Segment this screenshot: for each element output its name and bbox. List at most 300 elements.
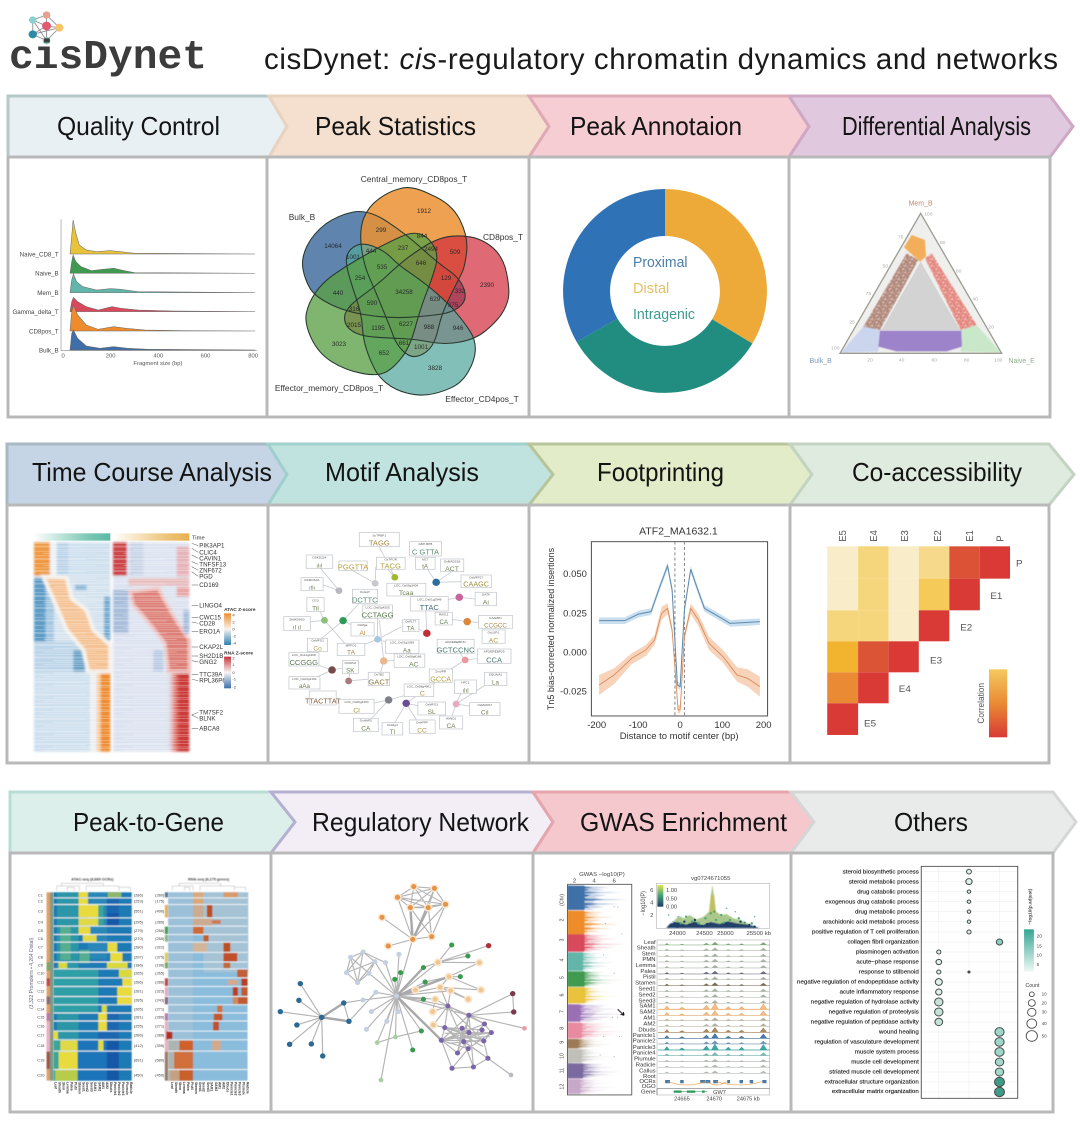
- heatmap labels: E3: [900, 530, 911, 542]
- box: [529, 157, 789, 417]
- venn counts: 6227: [399, 321, 413, 328]
- donut chart: [563, 189, 767, 393]
- box: [8, 157, 267, 417]
- cluster labels and counts: C11: [37, 979, 44, 984]
- genome tracks: Radicle: [636, 1062, 656, 1068]
- cluster labels and counts: C10: [37, 971, 44, 976]
- row side bars: [47, 892, 168, 1081]
- genome tracks: AM2: [643, 1021, 656, 1027]
- cluster labels and counts: (256): [155, 928, 165, 933]
- motif logo boxes: Tl: [390, 729, 395, 736]
- genome tracks: Lemma: [636, 963, 656, 969]
- nodes: purple cluster: [441, 1006, 491, 1068]
- sample labels: Lemma: [182, 1082, 186, 1094]
- sample labels: Panicle2: [233, 1082, 238, 1096]
- heatmap labels: E1: [965, 530, 976, 542]
- header: Regulatory Network: [271, 792, 553, 853]
- genome tracks: Pistil: [643, 975, 656, 981]
- blue series with ribbon: [599, 563, 760, 690]
- header: Others: [791, 792, 1076, 853]
- cluster labels and counts: (255): [134, 1023, 144, 1028]
- genome tracks: Leaf: [644, 940, 656, 946]
- sample labels: SAM2: [214, 1082, 218, 1091]
- genome tracks: Stamen: [635, 981, 656, 987]
- correlation triangle heatmap: [827, 530, 1023, 737]
- header: Peak-to-Gene: [10, 792, 295, 853]
- manhattan plot: 6: [613, 879, 616, 885]
- gene labels: PGD: [199, 573, 213, 580]
- panel: footprinting: [529, 444, 812, 763]
- GO term labels: striated muscle cell development: [829, 1069, 919, 1075]
- box: [529, 505, 790, 763]
- icon: network logo mark: [29, 11, 63, 44]
- header: Co-accessibility: [790, 444, 1074, 505]
- heatmap labels: [838, 530, 1023, 729]
- nodes: light orange cluster: [415, 962, 481, 1025]
- venn counts: 652: [379, 350, 390, 357]
- gene labels: TNFSF13: [199, 561, 227, 568]
- venn counts: 254: [355, 275, 366, 282]
- motif logo boxes: TA: [407, 626, 415, 633]
- genome tracks: Plumule: [634, 1057, 656, 1063]
- venn counts: 844: [417, 233, 428, 240]
- motif logo boxes: GATA: [482, 593, 491, 597]
- footprint line chart: ATF2_MA1632.1: [639, 527, 718, 538]
- header: Quality Control: Quality Control: [57, 111, 220, 141]
- motif logo boxes: Co: [313, 646, 322, 653]
- nodes: other singletons: [486, 943, 527, 1077]
- RNA legend: 2: [232, 655, 235, 660]
- motif logo boxes: TA: [347, 650, 356, 657]
- motif logo boxes: OsPLT7: [405, 620, 417, 624]
- ternary plot: [810, 201, 1035, 365]
- ternary plot: 100: [994, 358, 1003, 364]
- sample labels: Leaf: [170, 1082, 174, 1090]
- genome tracks: 24670: [706, 1097, 722, 1103]
- GO term labels: drug catabolic process: [857, 889, 919, 895]
- motif logo boxes: RAMOSA1: [304, 578, 320, 582]
- size legend: [1025, 983, 1047, 1041]
- dot plot: [797, 866, 1018, 1098]
- motif logo boxes: ıtlı: [309, 586, 316, 592]
- gene labels: BLNK: [199, 715, 215, 722]
- motif logo boxes: MLT: [422, 558, 428, 562]
- locus zoom plot: −log10(P): [641, 891, 647, 916]
- motif logo boxes: bZIP-BPB: [419, 542, 432, 546]
- motif logo boxes: OsHAP5: [360, 719, 372, 723]
- locus zoom plot: 0.50: [666, 896, 677, 902]
- sample labels: Lemma: [66, 1082, 70, 1094]
- motif logo boxes: Til: [312, 605, 319, 612]
- time bars: [34, 533, 205, 541]
- venn counts: 590: [367, 300, 378, 307]
- motif logo boxes: CCGGG: [289, 658, 318, 667]
- panel: co-accessibility: [790, 444, 1074, 763]
- ridge plot: fragment size: 200: [106, 354, 116, 360]
- motif logo boxes: LOC_Os06g4393: [344, 700, 369, 704]
- venn counts: 646: [416, 260, 427, 267]
- colour legend: −log10(p.adjust): [1027, 888, 1033, 925]
- manhattan plot: 4: [559, 958, 565, 961]
- ATAC legend: -4: [232, 641, 237, 646]
- sample labels: AM1: [218, 1082, 222, 1089]
- cluster labels and counts: (289): [155, 1014, 165, 1019]
- motif logo boxes: SL: [428, 709, 436, 716]
- ternary plot: Naive_E: [1008, 358, 1035, 365]
- size legend: 40: [1042, 1021, 1047, 1026]
- motif logo boxes: LOC_Os11g4408: [292, 653, 316, 657]
- GO term labels: steroid biosynthetic process: [843, 869, 919, 875]
- axes text: 100: [714, 720, 730, 730]
- GO term labels: muscle cell development: [851, 1059, 919, 1065]
- genome tracks: Seed3: [638, 998, 656, 1004]
- ATAC legend: 2: [232, 619, 235, 624]
- genome tracks: Seed1: [638, 987, 656, 993]
- donut legend: Distal: [633, 281, 669, 297]
- motif logo boxes: CC: [417, 727, 427, 734]
- cluster labels and counts: (175): [155, 899, 165, 904]
- motif logo boxes: Os04g4: [387, 723, 398, 727]
- cluster labels and counts: (289): [155, 920, 165, 925]
- header: Motif Analysis: Motif Analysis: [325, 457, 479, 487]
- motif logo boxes: Al: [359, 630, 365, 637]
- GO term labels: acute−phase response: [856, 960, 919, 966]
- genome tracks: OCRs: [639, 1079, 656, 1085]
- ternary plot: Bulk_B: [810, 358, 832, 365]
- network edges: [280, 887, 524, 1080]
- sample labels: AM1: [101, 1082, 105, 1089]
- motif nodes: [321, 574, 471, 707]
- manhattan plot: 3: [559, 939, 565, 941]
- sample labels: Dbuds: [226, 1082, 230, 1092]
- GO term labels: negative regulation of endopeptidase activity: [797, 980, 919, 986]
- nodes: blue cluster: [280, 984, 349, 1056]
- motif logo boxes: C GTTA: [412, 548, 439, 557]
- motif logo boxes: LOC_Os08g4961: [407, 684, 431, 688]
- motif logo boxes: CCA: [486, 655, 502, 664]
- correlation legend: Correlation: [976, 683, 986, 724]
- motif logo boxes: ılıl: [316, 563, 322, 569]
- ridge plot: fragment size: Fragment size (bp): [133, 361, 183, 367]
- venn counts: [324, 208, 494, 372]
- genome tracks: AM1: [643, 1016, 656, 1022]
- motif logo boxes: OsMFG1: [311, 639, 324, 643]
- box: [790, 505, 1049, 763]
- cluster labels and counts: (286): [134, 979, 144, 984]
- genome tracks: SAM2: [639, 1010, 656, 1016]
- cluster labels and counts: (289): [155, 1033, 165, 1038]
- sample labels: Radicle: [246, 1082, 250, 1094]
- motif logo boxes: CA: [446, 723, 456, 730]
- ridge plot: fragment size: Naive_CD8_T: [20, 251, 59, 258]
- venn counts: 316: [349, 306, 360, 313]
- genome tracks: GW7: [713, 1090, 726, 1096]
- cluster labels and counts: (496): [155, 909, 165, 914]
- ternary plot: 60: [932, 358, 937, 364]
- cluster labels and counts: (271): [155, 1006, 165, 1011]
- GO term labels: muscle system process: [855, 1049, 919, 1055]
- venn set labels: Effector_memory_CD8pos_T: [275, 383, 383, 393]
- motif logo boxes: SK: [346, 667, 354, 674]
- cluster labels and counts: (281): [134, 1014, 144, 1019]
- motif logo boxes: OsMADS7: [477, 703, 492, 707]
- cluster labels and counts: C4: [38, 920, 44, 925]
- GO term labels: positive regulation of T cell proliferation: [812, 930, 919, 936]
- genome tracks: SAM1: [639, 1004, 656, 1010]
- cluster labels and counts: C19: [37, 1058, 44, 1063]
- nodes: pale green: [377, 1037, 395, 1080]
- panel: peak statistics: [267, 96, 549, 417]
- header: Footprinting: Footprinting: [597, 457, 724, 487]
- ridge plot: fragment size: 400: [153, 354, 163, 360]
- header: Motif Analysis: [268, 444, 553, 505]
- locus zoom plot: 1.00: [666, 888, 677, 894]
- cluster labels and counts: (255): [155, 936, 165, 941]
- colour legend: 5: [1037, 962, 1040, 967]
- logo wordmark: cisDynet: [9, 35, 207, 81]
- locus zoom plot: 24000: [669, 931, 686, 937]
- gene labels: [192, 542, 227, 732]
- cluster labels and counts: [37, 892, 165, 1078]
- panel: time course analysis: [7, 444, 287, 763]
- donut legend: [633, 255, 695, 323]
- sample labels: [53, 1082, 250, 1096]
- gene labels: LINGO4: [199, 603, 223, 610]
- sample labels: Panicle1: [230, 1082, 234, 1096]
- locus zoom plot: 24500: [696, 931, 713, 937]
- orange series with ribbon: [599, 603, 760, 713]
- motif logo boxes: CAAGC: [463, 581, 489, 589]
- heatmap labels: E3: [930, 656, 942, 667]
- axes text: Distance to motif center (bp): [620, 731, 739, 741]
- motif logo boxes: CAAMP1: [489, 616, 502, 620]
- venn counts: 629: [430, 296, 441, 303]
- size legend: 10: [1042, 992, 1047, 997]
- heatmap labels: E2: [933, 530, 944, 542]
- motif logo boxes: GACT: [368, 678, 390, 687]
- ATAC heatmap: ATAC-seq (8,689 OCRs): [71, 877, 114, 881]
- motif logo boxes: CA: [361, 726, 371, 733]
- venn counts: 444: [366, 248, 377, 255]
- sample labels: AM2: [222, 1082, 226, 1089]
- locus zoom plot: 2: [650, 913, 653, 919]
- motif logo boxes: AP2/EREBP31: [445, 640, 466, 644]
- motif logo boxes: La: [492, 680, 500, 687]
- nodes: green cluster: [395, 945, 468, 1050]
- cluster labels and counts: C15: [37, 1014, 44, 1019]
- motif logo boxes: PGGTTA: [338, 562, 368, 571]
- box: [789, 157, 1050, 417]
- motif logo boxes: RAVL1: [439, 613, 449, 617]
- manhattan plot: 2: [573, 879, 576, 885]
- sample labels: Panicle2: [117, 1082, 121, 1096]
- GO term labels: regulation of vasculature development: [815, 1039, 919, 1045]
- motif logo boxes: GCTCCNC: [437, 645, 475, 654]
- manhattan plot: [559, 872, 632, 1095]
- sample labels: Panicle1: [113, 1082, 117, 1096]
- venn set labels: Central_memory_CD8pos_T: [361, 174, 467, 184]
- cluster labels and counts: (265): [134, 1006, 144, 1011]
- axes text: -100: [629, 720, 648, 730]
- RNA legend: -1: [232, 677, 237, 682]
- motif logo boxes: MPFO1: [346, 644, 357, 648]
- correlation legend: [976, 669, 1007, 737]
- motif logo boxes: AC: [409, 661, 419, 668]
- genome tracks: [633, 940, 770, 1103]
- box: [7, 505, 268, 763]
- panel: differential analysis: [789, 96, 1073, 417]
- genome tracks: 24665: [674, 1097, 690, 1103]
- motif logo boxes: aAa: [299, 683, 311, 690]
- ridge plot: fragment size: 0: [61, 354, 65, 360]
- panel: peak annotation: [529, 96, 809, 417]
- cluster labels and counts: (243): [155, 998, 165, 1003]
- logo: cisDynet: [9, 11, 207, 81]
- header: Peak Annotaion: [529, 96, 809, 157]
- venn counts: 332: [455, 288, 466, 295]
- genome tracks: 24675 kb: [737, 1097, 760, 1103]
- genome tracks: Gene: [641, 1089, 656, 1095]
- ridge plot: fragment size: Bulk_B: [39, 347, 59, 354]
- sample labels: Sheath: [174, 1082, 178, 1093]
- cluster labels and counts: C16: [37, 1023, 44, 1028]
- venn set labels: Bulk_B: [289, 212, 316, 222]
- motif logo boxes: AC: [489, 637, 498, 644]
- header: Peak Annotaion: Peak Annotaion: [570, 111, 742, 141]
- motif logo boxes: OsTPOR: [384, 558, 398, 562]
- RNA legend: RNA Z-score: [224, 650, 253, 656]
- cluster labels and counts: C13: [37, 998, 44, 1003]
- motif logo boxes: Aa: [403, 647, 411, 654]
- venn counts: 2015: [347, 322, 361, 329]
- cluster labels and counts: C20: [37, 1073, 44, 1078]
- venn counts: 535: [377, 264, 388, 271]
- cluster labels and counts: C2: [38, 899, 43, 904]
- ternary plot: 60: [956, 268, 962, 274]
- locus zoom plot: 25500 kb: [747, 931, 771, 937]
- ridge plot: fragment size: Gamma_delta_T: [12, 309, 59, 316]
- heatmap labels: E2: [960, 623, 972, 633]
- GO term labels: acute inflammatory response: [840, 990, 919, 996]
- gene labels: CAVIN1: [199, 555, 222, 562]
- colour legend: [1024, 888, 1042, 972]
- sample labels: Seed2: [202, 1082, 206, 1092]
- cluster labels and counts: (323): [155, 989, 165, 994]
- motif logo boxes: OsMADS18: [444, 559, 461, 563]
- genome tracks: Panicle2: [633, 1039, 656, 1045]
- locus zoom plot: [641, 876, 771, 937]
- cluster labels and counts: (412): [134, 1043, 144, 1048]
- colour legend: 15: [1037, 943, 1042, 948]
- cluster labels and counts: (297): [134, 954, 144, 959]
- cluster labels and counts: (279): [134, 928, 144, 933]
- nodes: orange cluster: [382, 887, 445, 946]
- locus zoom plot: 0.00: [666, 905, 677, 911]
- box: [267, 157, 529, 417]
- manhattan plot: 9: [559, 1041, 565, 1044]
- genome tracks: Panicle1: [633, 1033, 656, 1039]
- motif logo boxes: LOC_Os08g4186: [397, 654, 422, 658]
- cluster labels and counts: (270): [134, 936, 144, 941]
- gene labels: GNG2: [199, 659, 217, 666]
- genome tracks: Dbuds: [638, 1027, 656, 1033]
- ternary plot: 40: [973, 296, 978, 302]
- header: Co-accessibility: Co-accessibility: [852, 457, 1022, 487]
- ATAC heatmap: [34, 542, 110, 752]
- genome tracks: Root: [643, 1074, 656, 1080]
- sample labels: Pistil: [73, 1082, 78, 1090]
- sample labels: SAM1: [210, 1082, 214, 1091]
- colour legend: 10: [1037, 953, 1042, 958]
- ATAC legend: -2: [232, 633, 237, 638]
- motif logo boxes: HFC1: [461, 680, 470, 684]
- motif logo boxes: OsMga: [357, 623, 368, 627]
- GO term labels: negative regulation of hydrolase activity: [811, 999, 919, 1005]
- header: Differential Analysis: Differential Analysis: [842, 111, 1031, 141]
- motif logo boxes: Ai: [483, 600, 489, 607]
- GO term labels: plasminogen activation: [856, 949, 919, 955]
- manhattan plot: 10: [559, 1053, 565, 1059]
- time bars: Time: [192, 535, 205, 541]
- motif logo boxes: C: [420, 691, 425, 698]
- axes text: 0.050: [563, 569, 587, 579]
- axes text: 0.000: [563, 648, 587, 657]
- gene labels: CD28: [199, 620, 216, 627]
- donut legend: Intragenic: [633, 307, 695, 323]
- motif logo boxes: Cıl: [481, 710, 489, 717]
- RNA legend: 0: [232, 670, 235, 675]
- sample labels: Seed1: [198, 1082, 202, 1092]
- GO term labels: extracellular matrix organization: [832, 1089, 919, 1095]
- venn counts: 237: [398, 245, 409, 252]
- GO term labels: [797, 869, 919, 1095]
- gene labels: CKAP2L: [199, 644, 224, 651]
- cluster labels and counts: (285): [134, 998, 144, 1003]
- motif logo boxes: GCCA: [430, 675, 451, 683]
- motif logo boxes: ACT: [445, 566, 459, 573]
- venn set labels: [275, 174, 523, 404]
- motif logo boxes: CA: [439, 619, 449, 626]
- axes text: -0.025: [560, 687, 587, 697]
- cluster labels and counts: (286): [155, 979, 165, 984]
- gene labels: CD169: [199, 582, 219, 589]
- cluster labels and counts: C12: [37, 989, 44, 994]
- motif logo boxes: SQUA/A1: [489, 673, 502, 677]
- motif logo boxes: CCTAGG: [362, 611, 394, 620]
- heatmap labels: E1: [990, 591, 1002, 602]
- rotated cluster axis label: (3,322 Promoters • 4,264 Distal): [29, 937, 35, 1009]
- gene labels: PIK3AP1: [199, 542, 225, 549]
- GO term labels: collagen fibril organization: [847, 939, 919, 945]
- cluster labels and counts: C17: [37, 1033, 44, 1038]
- sample labels: Seed1: [81, 1082, 85, 1092]
- ternary plot: 75: [898, 235, 904, 241]
- gene labels: ABCA8: [199, 725, 220, 732]
- sample labels: Stamen: [194, 1082, 198, 1094]
- ATAC legend: ATAC Z-score: [224, 607, 256, 613]
- ternary plot: 100: [924, 212, 933, 218]
- cluster labels and counts: (286): [134, 1033, 144, 1038]
- cluster labels and counts: C5: [38, 928, 43, 933]
- sample labels: Plumule: [125, 1082, 129, 1095]
- header: Regulatory Network: Regulatory Network: [312, 807, 530, 837]
- motif logo boxes: AP2/EREBP29: [484, 649, 505, 653]
- panel: motif analysis: [268, 444, 553, 763]
- header: Others: Others: [894, 807, 968, 837]
- size legend: Count: [1025, 983, 1040, 989]
- ridge plot: fragment size: CD8pos_T: [29, 328, 59, 335]
- ternary plot: Mem_B: [909, 201, 933, 208]
